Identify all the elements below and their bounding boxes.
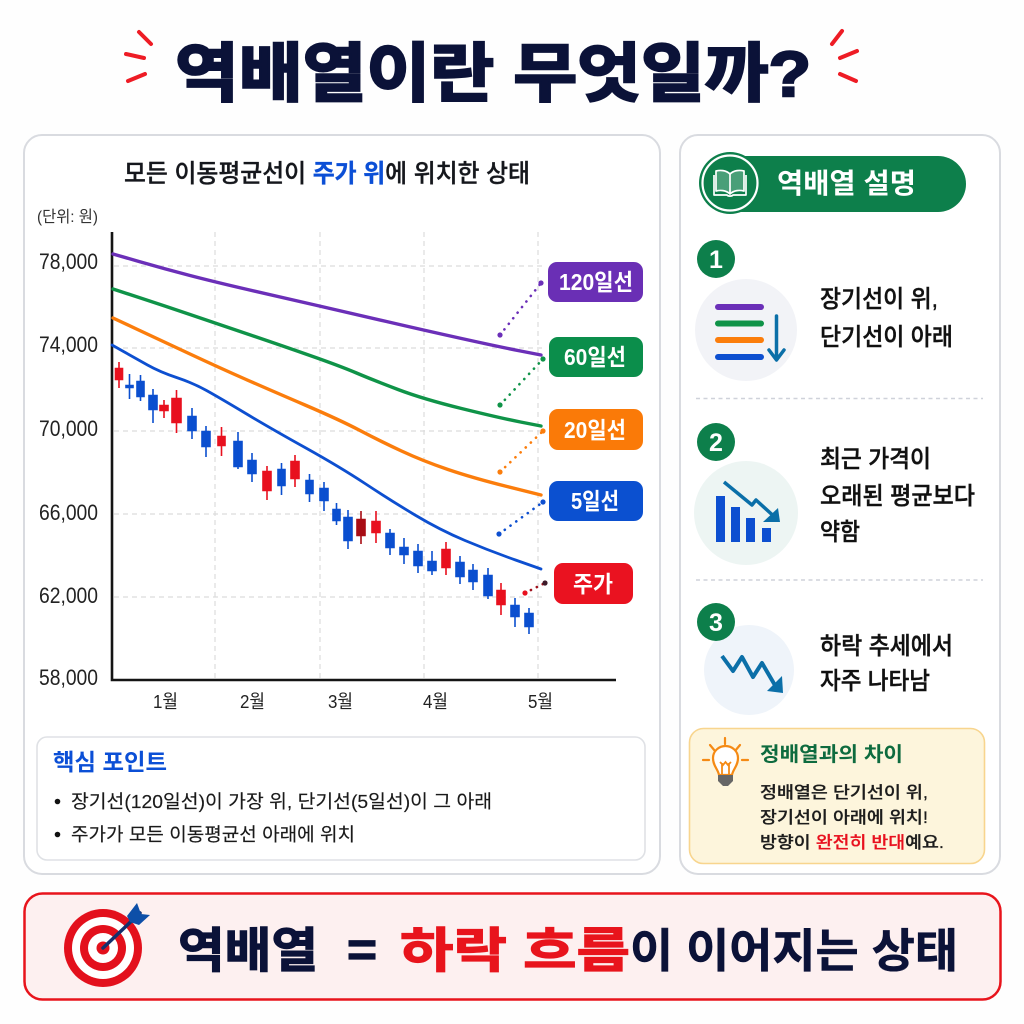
banner text: [178, 924, 958, 978]
banner text: 역배열: [178, 925, 318, 978]
number badge 2: [697, 423, 735, 461]
callout: price label: 주가: [573, 571, 613, 597]
callout: 60-day label: 60일선: [564, 344, 626, 370]
line: 120-day moving average: [113, 254, 541, 355]
callout: 120-day label: 120일선: [559, 269, 633, 295]
item 3 text: 자주 나타남: [820, 668, 930, 695]
x axis month labels: [153, 691, 553, 712]
y axis labels: 70,000: [39, 416, 98, 441]
title: 역배열이란 무엇일까?: [175, 38, 811, 110]
callout heading: 정배열과의 차이: [760, 743, 903, 766]
callout: 5-day label: [496, 481, 643, 537]
callout: 20-day label: [497, 409, 643, 475]
key point 1: 장기선(120일선)이 가장 위, 단기선(5일선)이 그 아래: [71, 791, 492, 812]
icon: open book: [714, 170, 746, 196]
unit label: (단위: 원): [37, 208, 98, 226]
item 3 text: [820, 633, 953, 695]
callout: 120-day label: [497, 262, 643, 338]
banner text: 이 이어지는 상태: [630, 925, 958, 977]
banner text: 하락 흐름: [400, 925, 630, 978]
panel: chart: [24, 135, 660, 874]
chart heading: 모든 이동평균선이 주가 위에 위치한 상태: [124, 160, 530, 188]
line: 20-day moving average: [113, 318, 541, 495]
number badge 1: [697, 240, 735, 278]
icon: falling bars with arrow: [694, 461, 798, 565]
icon: light bulb: [703, 738, 748, 786]
item 1 text: [820, 286, 953, 351]
item 2 text: 최근 가격이: [820, 446, 931, 473]
item 3: [697, 603, 953, 715]
panel: explanation: [680, 135, 1000, 874]
number badge 2: 2: [709, 429, 723, 457]
y axis labels: 74,000: [39, 332, 98, 357]
line: 60-day moving average: [113, 289, 541, 426]
candlesticks: blue falling: [126, 374, 533, 634]
item 1 text: 단기선이 아래: [820, 324, 953, 351]
callout body: [760, 783, 944, 852]
item 2: [694, 423, 975, 565]
line: 5-day moving average: [112, 345, 541, 569]
y axis labels: 62,000: [39, 583, 98, 608]
icon: stacked lines with down arrow: [695, 279, 797, 381]
explanation heading text: 역배열 설명: [777, 168, 916, 199]
icon: red emphasis sparks right: [832, 31, 857, 81]
x axis month labels: 2월: [240, 691, 265, 712]
item 3 text: 하락 추세에서: [820, 633, 953, 660]
key point 2: 주가가 모든 이동평균선 아래에 위치: [71, 824, 355, 845]
callout: 20-day label: 20일선: [564, 417, 626, 443]
key points heading: 핵심 포인트: [53, 749, 167, 775]
x axis month labels: 5월: [528, 691, 553, 712]
banner: conclusion: [24, 894, 1000, 1000]
item 1: [695, 240, 953, 381]
x axis month labels: 3월: [328, 691, 353, 712]
number badge 3: [697, 603, 735, 641]
y axis labels: 66,000: [39, 500, 98, 525]
y axis labels: 58,000: [39, 665, 98, 690]
icon: red emphasis sparks left: [126, 32, 151, 81]
callout: 60-day label: [497, 337, 643, 408]
item 2 text: [820, 446, 975, 546]
item 1 text: 장기선이 위,: [820, 286, 938, 313]
y axis labels: [39, 249, 98, 690]
panel: key points: [37, 737, 645, 860]
explanation heading pill: [699, 152, 966, 214]
callout: difference from forward alignment: [690, 728, 984, 864]
banner text: =: [347, 924, 377, 977]
callout body: 정배열은 단기선이 위,: [760, 783, 928, 802]
x axis month labels: 4월: [423, 691, 448, 712]
item 2 text: 약함: [820, 519, 860, 546]
callout: 5-day label: 5일선: [571, 488, 619, 514]
number badge 1: 1: [709, 246, 723, 274]
y axis labels: 78,000: [39, 249, 98, 274]
callout body: 장기선이 아래에 위치!: [760, 808, 928, 827]
callout body: 방향이 완전히 반대 예요.: [760, 833, 944, 852]
x axis month labels: 1월: [153, 691, 178, 712]
candlesticks: red rising: [116, 362, 505, 615]
callout: price label: [522, 563, 633, 604]
icon: target with dart: [64, 903, 150, 987]
item 2 text: 오래된 평균보다: [820, 483, 975, 510]
icon: zigzag downtrend arrow: [704, 625, 794, 715]
chart axes: [112, 232, 616, 680]
number badge 3: 3: [709, 609, 723, 637]
candlestick: dark red: [357, 511, 365, 544]
